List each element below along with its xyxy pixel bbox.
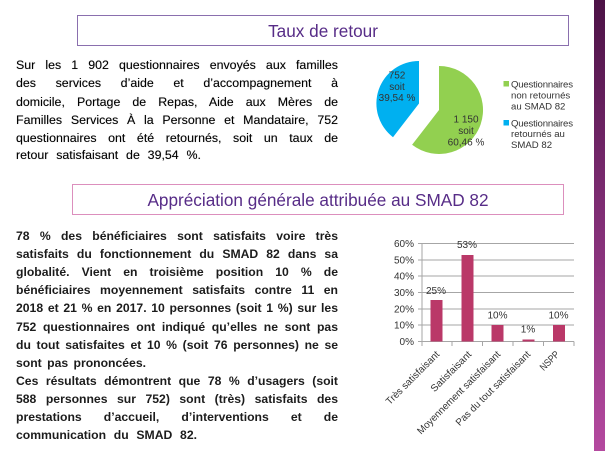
- text block: satisfaction analysis: 752 questionnaires ont indiqué qu’elles ne sont pas: [16, 320, 338, 334]
- pie slice: returned: 752: [389, 70, 406, 82]
- text block: satisfaction analysis: [16, 229, 338, 442]
- y axis labels: 10%: [394, 320, 414, 332]
- legend: SMAD 82: [511, 140, 552, 151]
- bar value labels: 10%: [548, 310, 569, 322]
- bars: [430, 255, 565, 342]
- text block: satisfaction analysis: satisfaits du fonctionnement du SMAD 82 dans sa: [16, 247, 338, 261]
- pie slice: not returned: [412, 66, 484, 154]
- text block: return rate paragraph: retour satisfaisant de 39,54 %.: [16, 148, 201, 162]
- bar value labels: 25%: [426, 286, 446, 297]
- text block: return rate paragraph: domicile, Portage de Repas, Aide aux Mères de: [16, 95, 338, 109]
- bar value labels: 10%: [487, 310, 508, 322]
- text block: return rate paragraph: questionnaires ont été retournés, soit un taux de: [16, 131, 338, 145]
- legend: Questionnaires: [511, 80, 573, 90]
- y axis labels: 50%: [394, 256, 414, 266]
- y axis labels: 60%: [394, 239, 414, 250]
- legend: au SMAD 82: [511, 102, 565, 112]
- legend: Questionnaires: [511, 118, 573, 130]
- sidebar: purple gradient band: [594, 0, 605, 451]
- text block: satisfaction analysis: communication du SMAD 82.: [16, 428, 197, 442]
- category labels: Satisfaisant: [429, 349, 474, 395]
- text block: satisfaction analysis: du tout satisfaites et 10 % (soit 76 personnes) ne se: [16, 338, 338, 352]
- heading: Taux de retour: Taux de retour: [268, 21, 378, 41]
- text block: return rate paragraph: [16, 58, 338, 162]
- category labels: NSPP: [538, 349, 562, 373]
- legend: [504, 80, 573, 151]
- text block: satisfaction analysis: bénéficiaires moyennement satisfaits contre 11 en: [16, 283, 338, 297]
- y axis labels: [394, 239, 414, 348]
- y axis labels: 20%: [394, 304, 414, 316]
- text block: return rate paragraph: Familles Services À la Personne et Mandataire, 752: [16, 113, 338, 127]
- text block: satisfaction analysis: globalité. Vient en troisième position 10 % de: [16, 265, 338, 279]
- bar chart: general satisfaction: [384, 239, 574, 437]
- y axis labels: 30%: [394, 288, 414, 299]
- category labels: Moyennement satisfaisant: [415, 349, 503, 437]
- y axis labels: 40%: [394, 272, 414, 282]
- bar value labels: [426, 240, 569, 336]
- category labels: Pas du tout satisfaisant: [454, 349, 533, 429]
- text block: satisfaction analysis: prestations d’accueil, d’interventions et de: [16, 410, 338, 424]
- y axis labels: 0%: [400, 337, 414, 348]
- y axis and gridlines: [418, 243, 574, 346]
- text block: return rate paragraph: des services d’aide et d’accompagnement à: [16, 76, 338, 90]
- text block: satisfaction analysis: 78 % des bénéficiaires sont satisfaits voire très: [16, 229, 338, 243]
- legend: retournés au: [511, 129, 565, 140]
- pie slice: not returned: soit: [458, 126, 474, 137]
- pie slice: returned: soit: [389, 82, 405, 93]
- text block: satisfaction analysis: Ces résultats démontrent que 78 % d’usagers (soit: [16, 374, 338, 388]
- pie slice: returned: [376, 61, 419, 137]
- text block: return rate paragraph: Sur les 1 902 questionnaires envoyés aux familles: [16, 58, 338, 72]
- text block: satisfaction analysis: 588 personnes sur 752) sont (très) satisfaits des: [16, 392, 338, 406]
- pie chart: questionnaires returned: [376, 61, 573, 154]
- text block: satisfaction analysis: 2018 et 21 % en 2017. 10 personnes (soit 1 %) sur les: [16, 301, 338, 315]
- category labels: Très satisfaisant: [384, 349, 442, 407]
- heading: Appréciation générale: Appréciation générale attribuée au SMAD 82: [147, 190, 489, 210]
- bar value labels: 53%: [457, 240, 477, 251]
- text block: satisfaction analysis: sont pas prononcées.: [16, 356, 146, 370]
- category labels: [384, 349, 562, 437]
- legend: non retournés: [511, 90, 570, 102]
- pie slice: not returned: 1 150: [453, 114, 479, 126]
- heading: Taux de retour: [77, 15, 569, 46]
- bar value labels: 1%: [521, 324, 535, 336]
- pie slice: not returned: 60,46 %: [448, 138, 484, 148]
- pie slice: returned: 39,54 %: [379, 93, 415, 104]
- heading: Appréciation générale: [72, 184, 564, 215]
